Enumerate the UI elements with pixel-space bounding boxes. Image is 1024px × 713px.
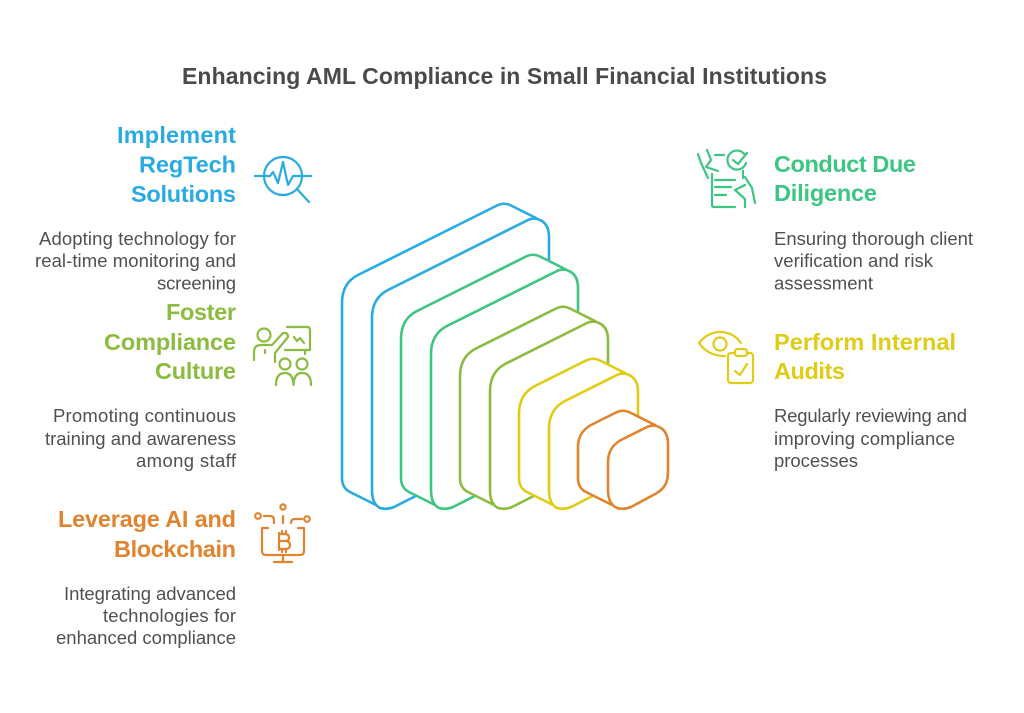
text: AI description: technologies for [103,605,236,626]
heading: Implement RegTech Solutions: RegTech [139,152,236,178]
layer: blue [342,204,549,509]
text: RegTech description [35,228,236,294]
icon: bitcoin monitor [255,504,310,562]
text: due diligence description [774,228,973,294]
icon: magnifier with pulse [255,157,311,202]
text: due diligence description: Ensuring thorough client [774,228,973,249]
layer: orange [578,411,668,509]
text: RegTech description: Adopting technology for [39,228,236,249]
heading: Implement RegTech Solutions: Implement [117,122,236,148]
heading: Conduct Due Diligence [774,151,916,206]
heading: Perform Internal Audits [774,329,956,384]
text: AI description: Integrating advanced [64,583,236,604]
icon: eye and clipboard [699,332,753,383]
layer: olive [460,307,608,509]
heading: Conduct Due Diligence: Conduct Due [774,151,916,177]
text: culture description: among staff [136,450,237,471]
text: culture description: training and awareness [45,428,236,449]
heading: Perform Internal Audits: Audits [774,358,845,384]
text: due diligence description: verification and risk [774,250,934,271]
heading: Leverage AI and Blockchain: Leverage AI and [58,506,236,532]
text: RegTech description: screening [157,272,236,294]
text: AI description [56,583,236,648]
layer: yellow [519,359,638,509]
nested layered squares diagram [342,204,668,509]
icon: document with hands and check [698,150,755,207]
heading: Implement RegTech Solutions: Solutions [131,181,236,207]
text: audits description [774,405,967,471]
heading: Perform Internal Audits: Perform Internal [774,329,956,355]
heading: Leverage AI and Blockchain [58,506,236,562]
text: RegTech description: real-time monitoring and [35,250,236,271]
text: due diligence description: assessment [774,272,873,294]
icon: presenter and audience [254,327,311,385]
heading: Conduct Due Diligence: Diligence [774,180,877,206]
title: Enhancing AML Compliance in Small Financial Institutions [182,63,827,89]
text: audits description: Regularly reviewing and [774,405,967,426]
heading: Foster Compliance Culture: Compliance [104,329,236,355]
heading: Leverage AI and Blockchain: Blockchain [114,536,236,562]
layer: green [401,255,578,509]
heading: Foster Compliance Culture [104,299,236,384]
heading: Implement RegTech Solutions [117,122,236,207]
text: culture description [45,405,237,471]
text: AI description: enhanced compliance [56,627,236,648]
text: culture description: Promoting continuous [53,405,236,426]
text: audits description: processes [774,450,858,471]
heading: Foster Compliance Culture: Foster [166,299,236,325]
text: audits description: improving compliance [774,428,955,449]
heading: Foster Compliance Culture: Culture [155,358,236,384]
